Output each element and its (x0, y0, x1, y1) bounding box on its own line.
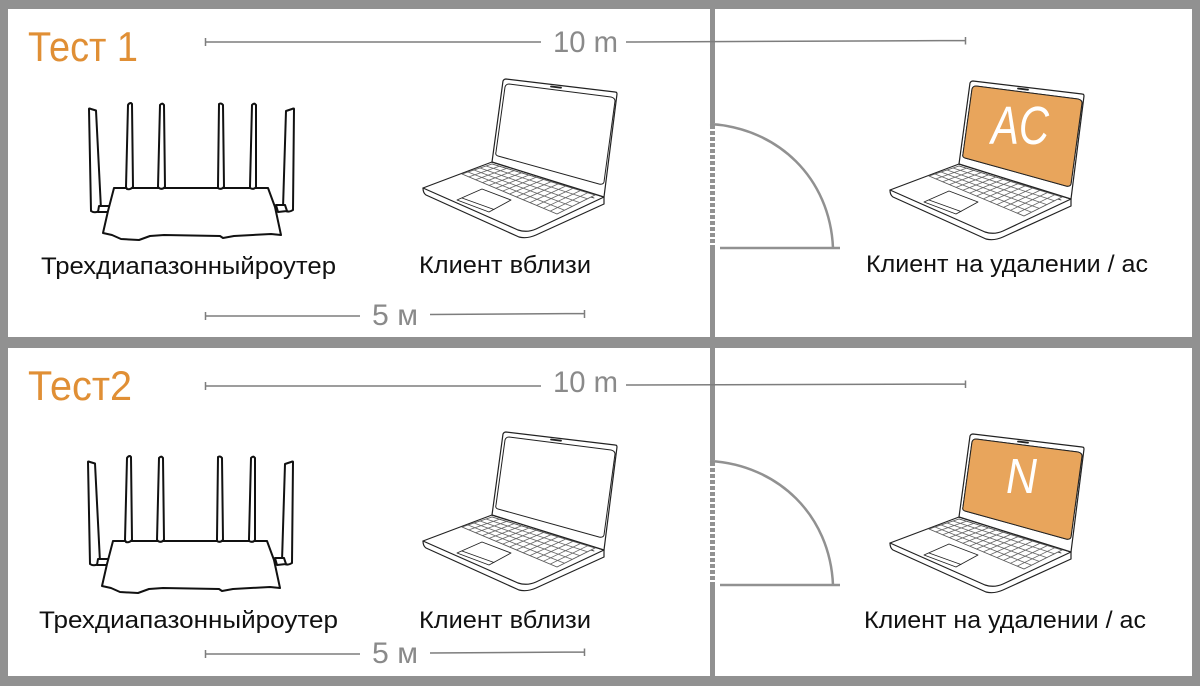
screen label: AC: AC (989, 96, 1050, 156)
label: far client: Клиент на удалении / ac (866, 251, 1148, 278)
dimension: 10 m (206, 366, 966, 399)
dimension: 10 m (206, 26, 966, 59)
label: far client: Клиент на удалении / ac (864, 607, 1146, 634)
icon: far laptop with N screen (890, 434, 1084, 593)
wall with door (710, 9, 840, 337)
dimension: 10 m: 10 m (553, 26, 618, 59)
dimension: 5 m (206, 299, 584, 332)
icon: router (88, 456, 293, 593)
label: near client: Клиент вблизи (419, 607, 591, 634)
icon: near laptop (423, 79, 617, 238)
dimension: 5 m: 5 м (372, 637, 418, 670)
wall with door (710, 348, 840, 676)
icon: far laptop with AC screen (890, 81, 1084, 240)
dimension: 5 m: 5 м (372, 299, 418, 332)
dimension: 10 m: 10 m (553, 366, 618, 399)
dimension: 5 m (206, 637, 584, 670)
heading: test 2: Тест2 (28, 362, 132, 409)
icon: near laptop (423, 432, 617, 591)
icon: router (89, 103, 294, 240)
heading: test 1: Тест 1 (28, 23, 138, 70)
panel: test 2 (8, 348, 1192, 676)
label: near client: Клиент вблизи (419, 252, 591, 279)
label: router: Трехдиапазонныйроутер (39, 607, 338, 634)
panel: test 1 (8, 9, 1192, 337)
screen label: N: N (1006, 450, 1038, 504)
label: router: Трехдиапазонныйроутер (41, 253, 336, 280)
